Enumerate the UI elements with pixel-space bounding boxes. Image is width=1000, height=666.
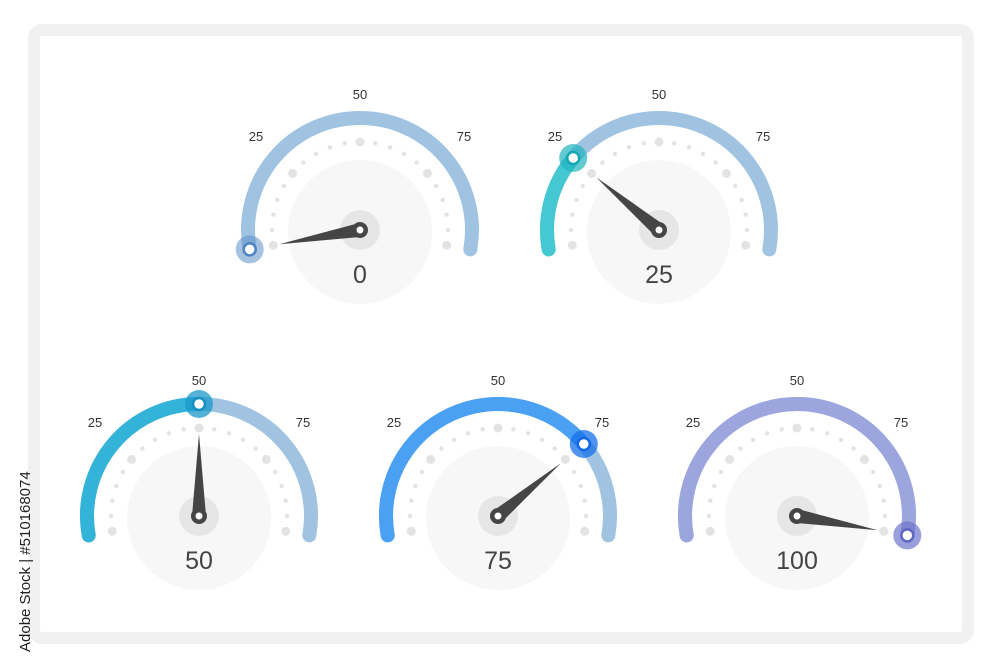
gauge: 75 — [386, 373, 610, 590]
value 25: 25 — [645, 261, 673, 289]
needle 25 — [591, 171, 670, 241]
gauge: 100 — [685, 373, 921, 590]
value 75: 75 — [484, 547, 512, 575]
marker 100 — [893, 521, 921, 549]
needle 50 — [191, 434, 207, 524]
marker 0 — [236, 235, 264, 263]
gauge: 25 — [547, 87, 771, 304]
marker 75 — [570, 430, 598, 458]
active arc 75 — [386, 404, 584, 535]
active arc 50 — [87, 404, 199, 535]
gauge: 0 — [236, 87, 472, 304]
active arc 25 — [547, 158, 573, 249]
marker 50 — [185, 390, 213, 418]
gauge: 50 — [87, 373, 311, 590]
active arc 100 — [685, 404, 909, 535]
needle 100 — [788, 507, 879, 538]
marker 25 — [559, 144, 587, 172]
credit text: Adobe Stock | #510168074 — [17, 471, 34, 652]
value 0: 0 — [353, 261, 367, 289]
needle 0 — [278, 221, 369, 252]
value 100: 100 — [776, 547, 818, 575]
value 50: 50 — [185, 547, 213, 575]
needle 75 — [487, 457, 566, 527]
